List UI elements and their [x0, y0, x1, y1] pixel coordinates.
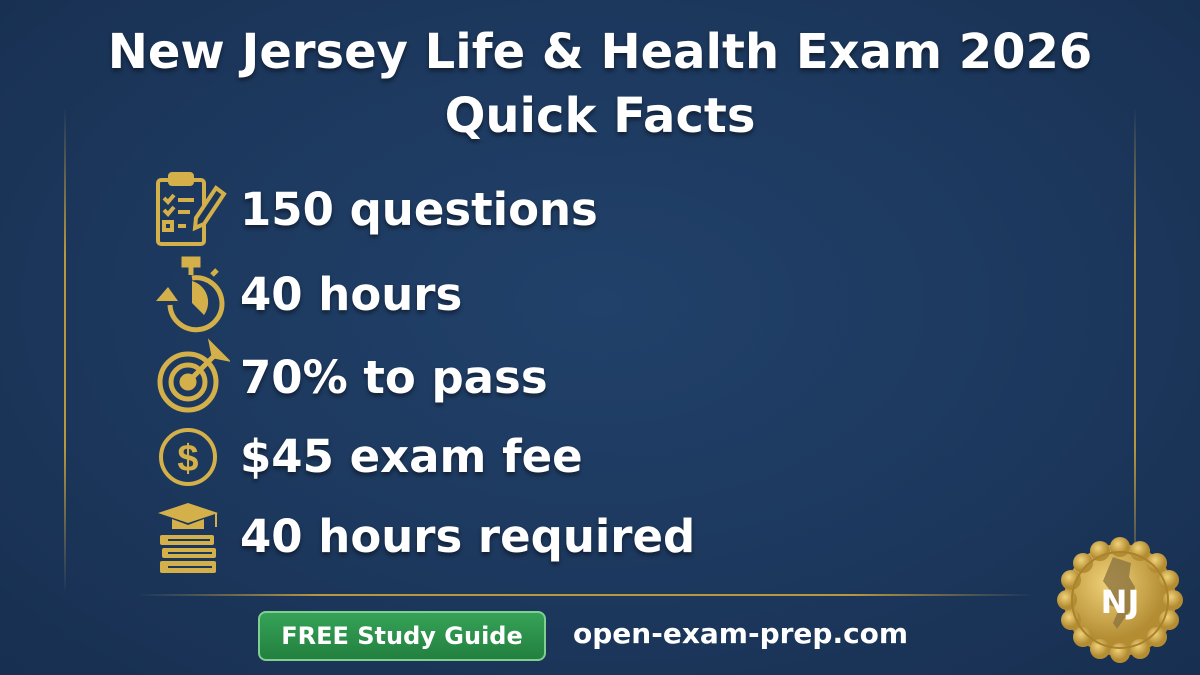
icon: books with cap	[158, 503, 218, 573]
icon: dollar	[159, 428, 217, 486]
icon: stopwatch	[156, 256, 224, 332]
item: $45 exam fee: $45 exam fee	[240, 430, 583, 483]
item: 150 questions: 150 questions	[240, 183, 598, 236]
item: 40 hours required: 40 hours required	[240, 510, 695, 563]
item: 40 hours: 40 hours	[240, 268, 462, 321]
icon: dollar: $	[177, 438, 199, 480]
icon: clipboard	[156, 172, 227, 246]
decorative gold lines	[64, 110, 66, 590]
badge: NJ seal: NJ	[1101, 583, 1139, 621]
button: FREE Study Guide	[258, 611, 546, 661]
badge: NJ seal	[1057, 537, 1183, 663]
icon: target	[158, 338, 230, 412]
item: 70% to pass: 70% to pass	[240, 351, 548, 404]
button: FREE Study Guide: FREE Study Guide	[281, 622, 523, 650]
title	[108, 24, 1092, 144]
title: New Jersey Life & Health Exam 2026	[108, 24, 1092, 80]
url: open-exam-prep.com	[573, 617, 908, 650]
title: Quick Facts	[445, 88, 755, 144]
